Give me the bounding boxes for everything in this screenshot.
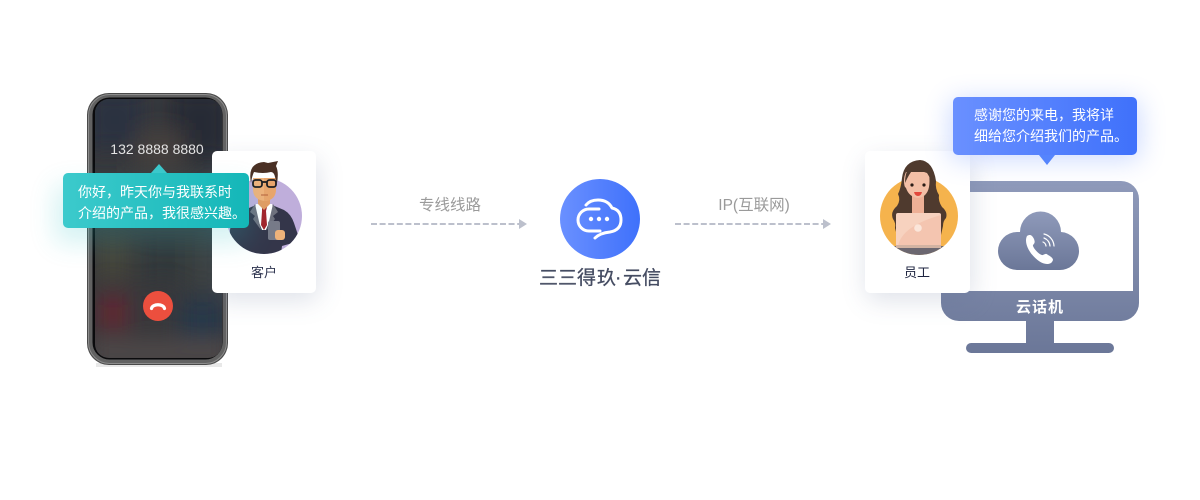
- arrow: dedicated line: [371, 219, 527, 229]
- callout: employee speech: [950, 97, 1140, 165]
- panel: employee card: [865, 151, 972, 300]
- logo wordmark: 三三得玖·云信: [539, 267, 661, 289]
- callout: employee speech: 细给您介绍我们的产品。: [974, 128, 1128, 144]
- phone screen: [95, 99, 222, 358]
- label: customer: 客户: [251, 265, 277, 280]
- avatar: customer: [228, 161, 302, 254]
- callout: employee speech: 感谢您的来电，我将详: [974, 107, 1114, 123]
- icon: hang up button: [143, 291, 173, 321]
- arrow: IP internet: [675, 219, 831, 229]
- panel: customer card: [212, 151, 318, 300]
- callout: customer speech: 你好，昨天你与我联系时: [78, 184, 232, 200]
- label: IP internet: IP(互联网): [718, 196, 790, 214]
- icon: cloud phone: [998, 212, 1079, 270]
- callout: customer speech: 介绍的产品，我很感兴趣。: [78, 205, 246, 221]
- phone: [85, 90, 230, 367]
- icon: cloud chat logo: [560, 179, 640, 259]
- monitor: [941, 181, 1139, 353]
- label: dedicated line: 专线线路: [419, 196, 481, 214]
- label: cloud phone: 云话机: [1016, 299, 1064, 316]
- phone number: 132 8888 8880: [110, 141, 204, 157]
- label: employee: 员工: [904, 265, 930, 280]
- avatar: employee: [880, 160, 958, 258]
- callout: customer speech: [55, 164, 250, 243]
